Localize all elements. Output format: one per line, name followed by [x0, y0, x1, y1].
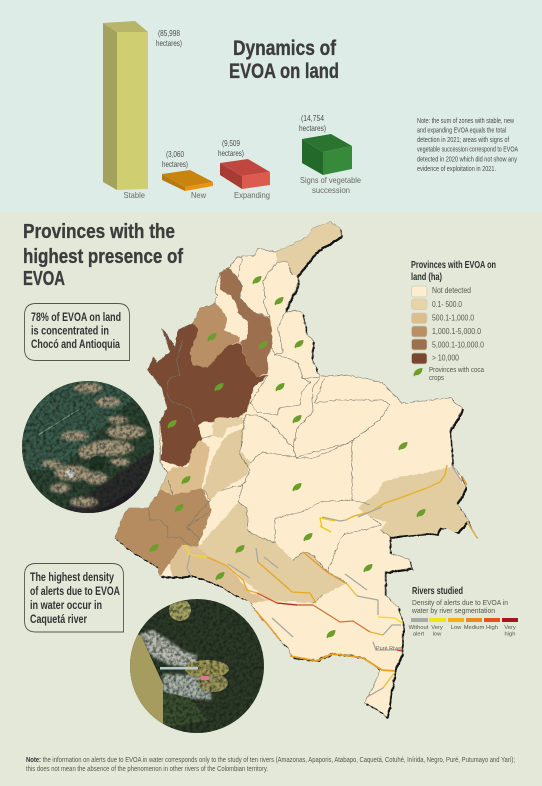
- base: not detected: [115, 222, 477, 717]
- title: dynamics of EVOA on land: EVOA on land: [229, 60, 339, 83]
- province: Cordoba: [190, 302, 240, 367]
- province: Cauca and Narino: [115, 488, 212, 576]
- province: La Guajira: [275, 222, 341, 275]
- legend: provinces with EVOA on land: 500.1-1,000.0: [432, 314, 474, 322]
- heading: provinces with the highest presence of EVOA: Provinces with the: [23, 221, 175, 243]
- bar: new: hectares): [162, 159, 188, 169]
- province borders: [148, 257, 390, 603]
- text block: top note: Note: the sum of zones with stable, new: [417, 118, 515, 125]
- bar: signs of vegetable succession: (14,754: [301, 113, 324, 123]
- province: Guainia: [358, 466, 477, 538]
- legend: rivers studied: Very: [504, 625, 516, 631]
- bar: stable: Stable: [124, 190, 145, 200]
- bar: new: [162, 149, 213, 200]
- heading: provinces with the highest presence of EVOA: highest presence of: [23, 246, 183, 268]
- background: top section: [0, 0, 542, 212]
- callout: 78% of EVOA on land: [24, 304, 130, 360]
- map shadow: [116, 224, 478, 719]
- bar: signs of vegetable succession: succession: [312, 185, 350, 195]
- legend: provinces with EVOA on land: [411, 260, 496, 382]
- callout: highest density of alerts: in water occur in: [30, 600, 102, 612]
- legend: rivers studied: Low: [451, 625, 462, 631]
- bar: new: New: [191, 190, 207, 200]
- callout: 78% of EVOA on land: is concentrated in: [31, 326, 109, 338]
- bar: expanding: (9,509: [222, 138, 240, 148]
- province: Caqueta: [198, 502, 347, 603]
- footnote: this does not mean the absence of the phenomenon in other rivers of the Colombian territory.: [26, 766, 268, 773]
- callout: highest density of alerts: The highest density: [30, 572, 114, 584]
- province: Putumayo: [170, 545, 267, 603]
- legend: rivers studied: low: [433, 632, 442, 638]
- legend: provinces with EVOA on land: 0.1- 500.0: [432, 300, 462, 309]
- legend: rivers studied: Without: [409, 625, 429, 631]
- legend: rivers studied: water by river segmentation: [411, 606, 495, 615]
- province: Valle: [160, 440, 210, 495]
- legend: rivers studied: Density of alerts due to EVOA in: [412, 598, 508, 607]
- text block: top note: evidence of exploitation in 2021.: [417, 166, 496, 173]
- photo: river mining aerial view: [130, 599, 265, 734]
- legend: rivers studied: Very: [431, 625, 443, 631]
- province: Tolima: [203, 428, 250, 500]
- bar: expanding: Expanding: [234, 190, 270, 200]
- legend: provinces with EVOA on land: 1,000.1-5,000.0: [432, 327, 481, 336]
- legend: provinces with EVOA on land: 5,000.1-10,000.0: [432, 340, 484, 350]
- bar: signs of vegetable succession: Signs of vegetable: [300, 175, 361, 185]
- province: Caldas: [212, 417, 245, 438]
- bar: new: (3,060: [166, 149, 184, 159]
- title: dynamics of EVOA on land: Dynamics of: [233, 37, 337, 60]
- legend: rivers studied: High: [486, 625, 498, 631]
- text block: top note: and expanding EVOA equals the total: [417, 128, 506, 134]
- text block: top note: detected in 2020 which did not show any: [417, 156, 517, 164]
- legend: provinces with EVOA on land: Not detected: [432, 286, 471, 295]
- legend: rivers studied: Medium: [464, 625, 484, 631]
- bar chart: dynamics of EVOA: [103, 21, 361, 200]
- callout: highest density of alerts: Caquetá river: [30, 614, 87, 626]
- background: bottom section: [0, 212, 542, 786]
- legend: rivers studied: alert: [413, 632, 425, 638]
- bar: signs of vegetable succession: hectares): [299, 123, 326, 133]
- bar: expanding: hectares): [218, 148, 244, 158]
- legend: rivers studied: high: [505, 632, 515, 638]
- map: Colombia provinces: [115, 222, 478, 719]
- text block: top note: detection in 2021; areas with signs of: [417, 137, 509, 144]
- text: Pure River label: Puré River: [376, 646, 402, 652]
- callout: 78% of EVOA on land: Chocó and Antioquia: [31, 339, 120, 351]
- callout: highest density of alerts: of alerts due to EVOA: [30, 586, 120, 598]
- heading: provinces with the highest presence of EVOA: EVOA: [23, 268, 65, 290]
- rivers: [185, 465, 477, 697]
- legend: provinces with EVOA on land: land (ha): [411, 272, 442, 283]
- bar: stable: (85,998: [158, 28, 180, 38]
- heading: provinces with the highest presence of EVOA: [23, 221, 183, 290]
- provinces fill and borders: [115, 222, 477, 717]
- callout: highest density of alerts: [24, 564, 124, 632]
- bar: stable: hectares): [156, 38, 182, 48]
- icons: coca leaves: [150, 276, 426, 638]
- photo: land mining aerial view: [22, 381, 154, 513]
- province: Bolivar: [220, 267, 273, 377]
- title: dynamics of EVOA on land: [229, 37, 339, 83]
- bar: stable: [103, 21, 182, 200]
- text block: top note: [417, 118, 518, 173]
- bar: signs of vegetable succession: [299, 113, 361, 195]
- legend: rivers studied: Rivers studied: [412, 586, 463, 597]
- legend: rivers studied: [409, 586, 518, 638]
- bar: expanding: [218, 138, 270, 200]
- legend: provinces with EVOA on land: Provinces with coca: [429, 367, 484, 374]
- callout: 78% of EVOA on land: 78% of EVOA on land: [31, 312, 121, 324]
- legend: provinces with EVOA on land: > 10,000: [432, 354, 459, 362]
- province: Choco and Antioquia: [148, 323, 268, 467]
- legend: provinces with EVOA on land: crops: [429, 375, 444, 382]
- legend: provinces with EVOA on land: Provinces with EVOA on: [411, 260, 496, 271]
- footnote: [26, 757, 515, 773]
